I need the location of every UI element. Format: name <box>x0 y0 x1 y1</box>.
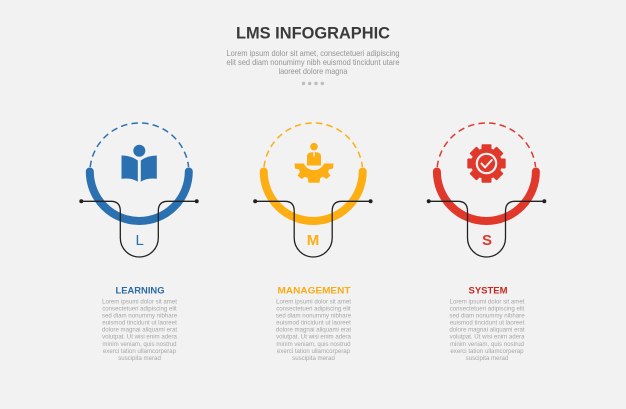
description: management: euismod tincidunt ut laoreet <box>276 320 351 327</box>
description: management: suscipita merad <box>292 355 335 362</box>
description: management: minim veniam, quis nostrud <box>276 341 351 348</box>
dashed arc: system <box>437 123 536 167</box>
dashed arc: management <box>264 123 362 167</box>
dashed arc: learning <box>90 123 189 167</box>
description: system: consectetueri adipiscing elit <box>450 306 525 312</box>
description: system: sed diam nonummy nibhare <box>449 313 525 320</box>
description: learning: volutpat. Ut wisi enim adera <box>102 334 178 341</box>
subtitle text: laoreet dolore magna <box>278 67 348 76</box>
connector end dots: system <box>427 199 546 203</box>
description: learning: euismod tincidunt ut laoreet <box>102 320 177 327</box>
description: management: dolore magnai aliquami erat <box>276 327 351 334</box>
description: system: exerci tation ullamcorperap <box>450 348 524 355</box>
subtitle text <box>226 49 400 76</box>
description: system: volutpat. Ut wisi enim adera <box>450 334 525 341</box>
subtitle text: elit sed diam nonumimy nibh euismod tincidunt utare <box>226 58 400 67</box>
description: learning: Lorem ipsumi dolor sit amet <box>102 298 177 306</box>
title: LMS INFOGRAPHIC <box>236 24 390 42</box>
description: management <box>276 298 352 362</box>
subtitle text: Lorem ipsum dolor sit amet, consectetueri adipiscing <box>226 49 400 58</box>
description: learning <box>102 298 178 362</box>
description: system: suscipita merad <box>466 355 508 362</box>
letter L: L <box>136 232 144 249</box>
description: learning: exerci tation ullamcorperap <box>103 348 177 355</box>
description: system: dolore magnai aliquami erat <box>449 327 525 334</box>
thick arc: learning <box>90 172 189 221</box>
description: learning: suscipita merad <box>118 355 161 362</box>
connector line: learning <box>81 201 197 257</box>
description: management: consectetueri adipiscing elit <box>276 306 351 312</box>
connector end dots: management <box>253 199 373 203</box>
description: system: Lorem ipsumi dolor sit amet <box>450 298 525 306</box>
letter M: M <box>307 232 319 249</box>
panel: system <box>427 123 546 362</box>
description: learning: minim veniam, quis nostrud <box>102 341 177 348</box>
heading: management: MANAGEMENT <box>278 286 351 296</box>
panel: learning <box>79 123 199 362</box>
icon: person on gear <box>294 143 334 183</box>
description: management: volutpat. Ut wisi enim adera <box>276 334 352 341</box>
icon: open book reader <box>122 145 157 182</box>
description: learning: sed diam nonummy nibhare <box>102 313 178 320</box>
description: management: sed diam nonummy nibhare <box>276 313 352 320</box>
connector line: management <box>255 201 371 257</box>
panel: management <box>253 123 373 362</box>
letter S: S <box>482 232 492 249</box>
icon: gear with check <box>467 144 506 183</box>
description: learning: dolore magnai aliquami erat <box>102 327 177 334</box>
description: system: euismod tincidunt ut laoreet <box>450 320 525 327</box>
thick arc: management <box>264 172 363 221</box>
thick arc: system <box>437 172 536 221</box>
connector line: system <box>429 201 544 257</box>
heading: learning: LEARNING <box>116 286 164 296</box>
pagination dots <box>302 82 324 85</box>
connector end dots: learning <box>79 199 199 203</box>
description: management: Lorem ipsumi dolor sit amet <box>276 298 351 306</box>
description: learning: consectetueri adipiscing elit <box>102 306 177 312</box>
description: management: exerci tation ullamcorperap <box>277 348 351 355</box>
description: system: minim veniam, quis nostrud <box>450 341 524 348</box>
heading: system: SYSTEM <box>468 286 508 296</box>
description: system <box>449 298 525 362</box>
